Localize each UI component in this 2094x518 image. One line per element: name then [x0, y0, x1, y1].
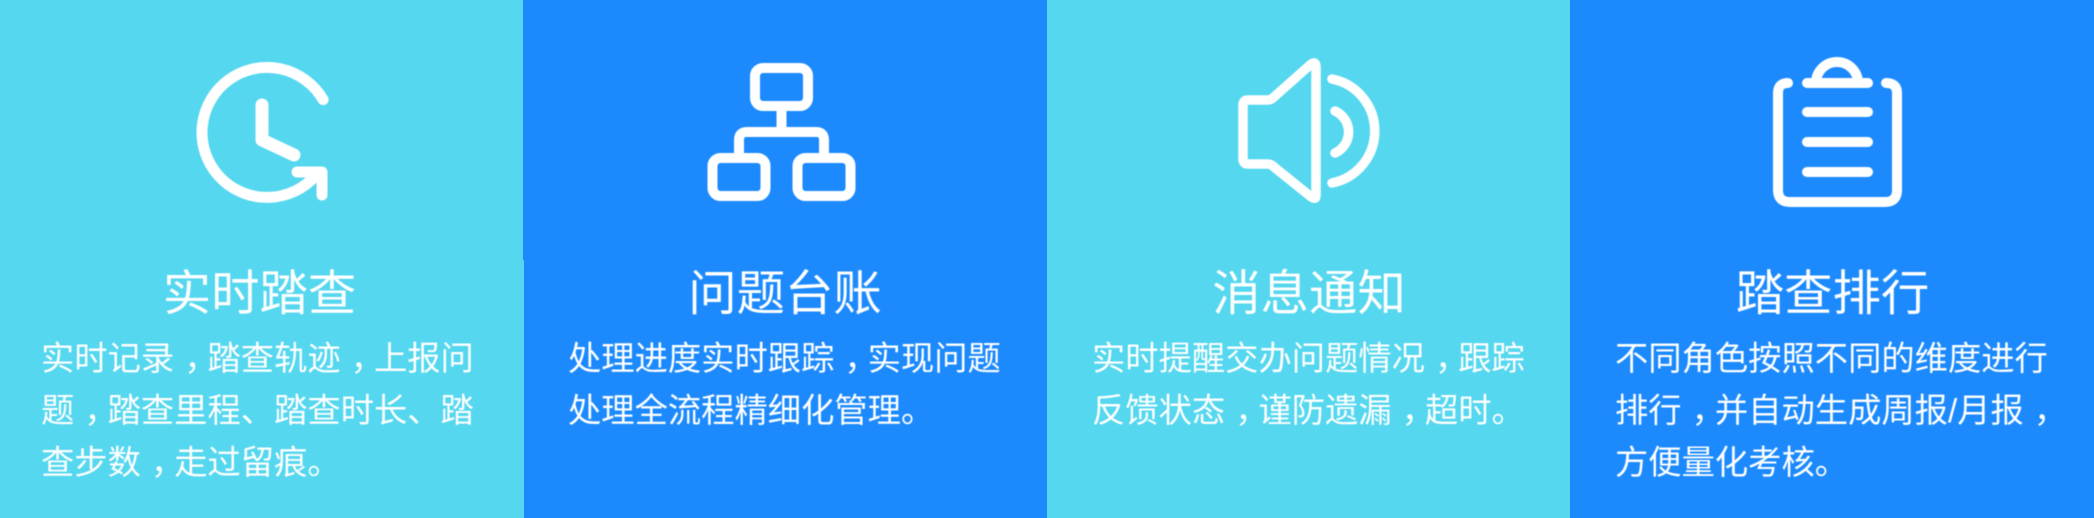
icon: clock with arrow [202, 67, 323, 197]
text block: 消息通知说明: 实时提醒交办问题情况 ，跟踪 [1092, 341, 1525, 378]
panel: 实时踏查 [0, 0, 524, 518]
text block: 实时踏查说明 [41, 340, 474, 482]
text block: 踏查排行说明: 不同角色按照不同的维度进行 [1615, 341, 2048, 378]
text block: 问题台账说明: 处理全流程精细化管理。 [568, 393, 934, 430]
icon: speaker [1243, 63, 1375, 198]
text block: 踏查排行说明: 排行 ，并自动生成周报/月报 ， [1615, 393, 2067, 430]
text block: 实时踏查说明: 实时记录 ，踏查轨迹 ，上报问 [41, 341, 474, 378]
title: 问题台账: 问题台账 [688, 267, 882, 321]
text block: 实时踏查说明: 查步数 ，走过留痕。 [41, 445, 341, 482]
icon: clipboard [1778, 62, 1897, 202]
text block: 问题台账说明: 处理进度实时跟踪 ，实现问题 [568, 341, 1001, 378]
panel: 消息通知 [1047, 0, 1570, 518]
text block: 问题台账说明 [568, 340, 1000, 426]
text block: 踏查排行说明 [1615, 340, 2067, 482]
text block: 实时踏查说明: 题 ，踏查里程、踏查时长、踏 [41, 393, 474, 430]
text block: 踏查排行说明: 方便量化考核。 [1615, 445, 1848, 482]
icon: hierarchy [712, 68, 850, 196]
text block: 消息通知说明 [1092, 340, 1525, 430]
panel: 踏查排行 [1570, 0, 2094, 518]
panel: 问题台账 [523, 0, 1047, 518]
title: 消息通知: 消息通知 [1212, 267, 1406, 321]
title: 实时踏查: 实时踏查 [163, 267, 356, 321]
text block: 消息通知说明: 反馈状态 ，谨防遗漏 ，超时。 [1092, 393, 1525, 430]
title: 踏查排行: 踏查排行 [1736, 267, 1929, 321]
